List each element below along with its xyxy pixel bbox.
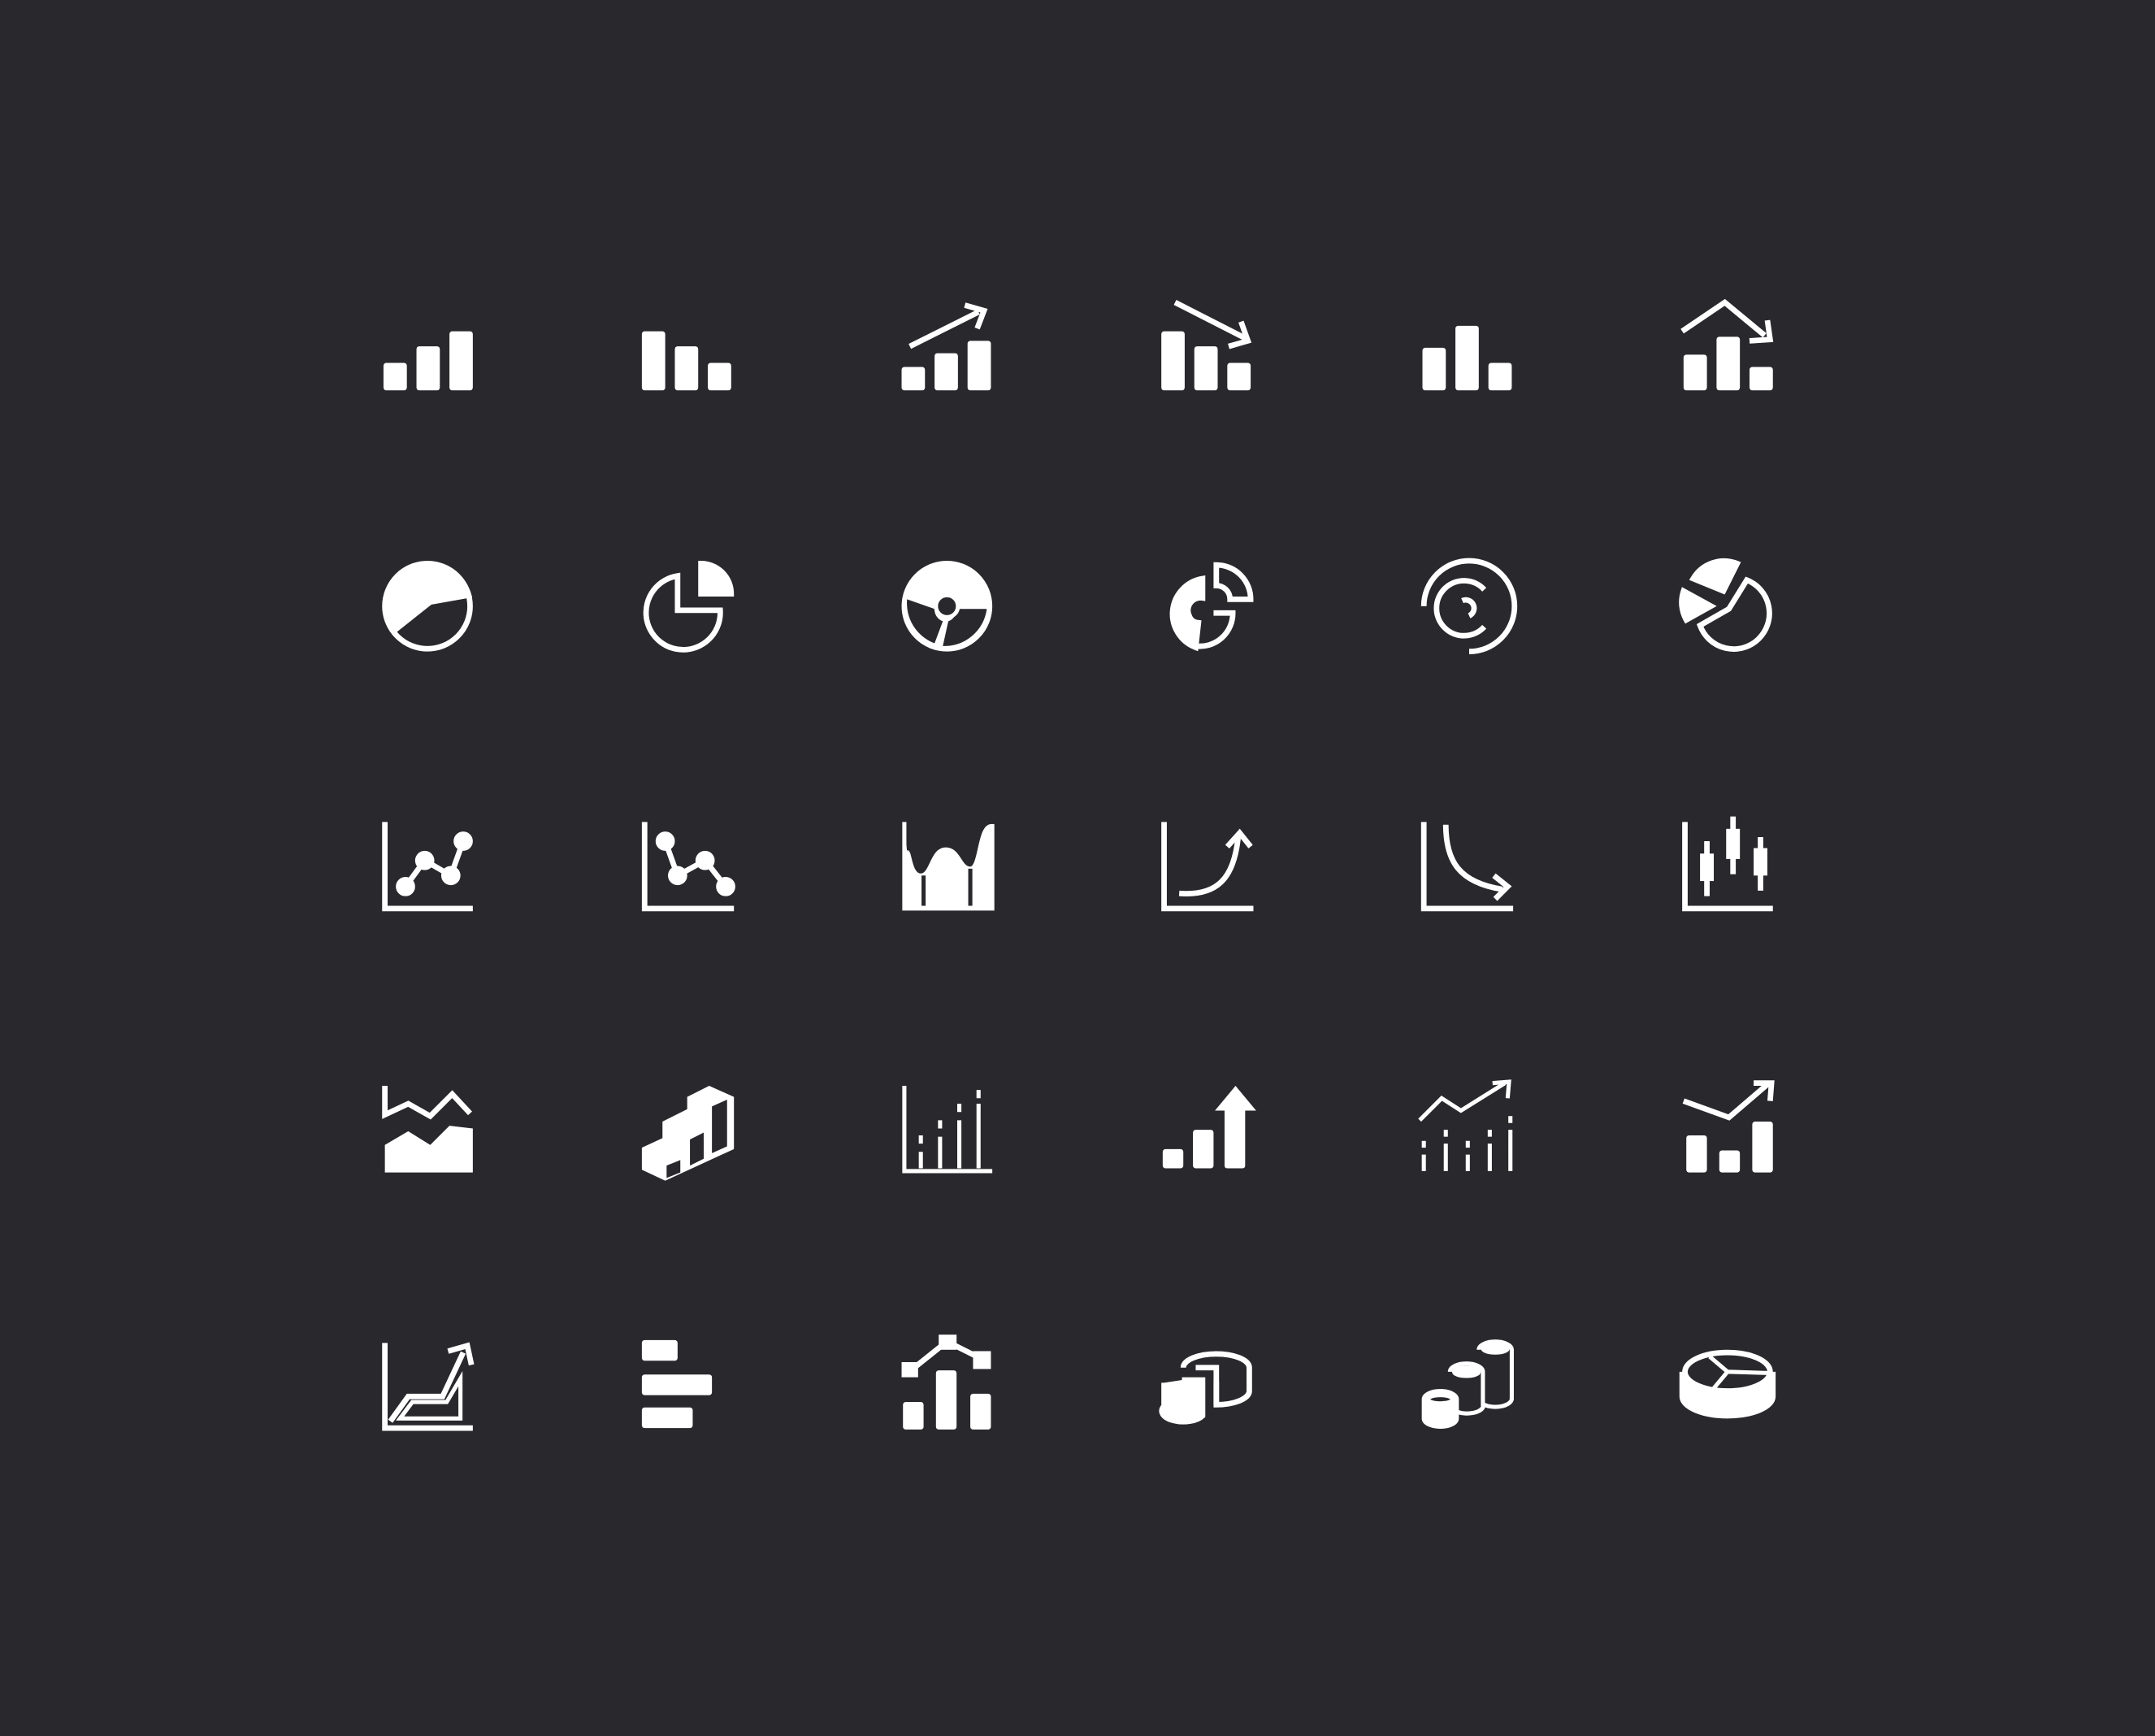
icon: curve up chart (1164, 822, 1253, 909)
icon: pie filled (385, 563, 470, 649)
icon: spiral rings (1424, 561, 1515, 652)
icon: 3D pie disk (1682, 1352, 1773, 1416)
icon: bars with down arrow (1161, 302, 1251, 390)
icon: dashed bars with trend (1420, 1082, 1511, 1171)
icon: pie split pieces (1682, 561, 1769, 649)
icon: descending bars (642, 332, 731, 390)
icon: horizontal bars (642, 1340, 712, 1428)
icon: bars with up arrow (902, 305, 991, 390)
icon: 3D coin stacks (1424, 1342, 1511, 1426)
icon: donut exploded (1173, 565, 1251, 648)
icon: line chart with points (385, 822, 473, 909)
icon: bars with check-like arrow (1684, 1083, 1773, 1173)
icon: 3D pie pieces (1162, 1354, 1249, 1421)
icon: curve down chart (1424, 822, 1513, 909)
icon: 3D isometric bars (642, 1086, 734, 1181)
icon: descending line chart (644, 822, 734, 909)
icon: pie outline exploded (646, 563, 731, 649)
icon: ascending bars (384, 332, 473, 390)
icon: area wave chart (904, 822, 992, 909)
icon: candlestick chart (1685, 817, 1773, 909)
icon: area/line chart (385, 1086, 473, 1173)
icon: bars with peak line (1682, 302, 1773, 390)
icon: dashed bar chart (904, 1086, 992, 1171)
icon: bars with line overlay (902, 1335, 991, 1430)
icon: bars with up arrow big (1163, 1086, 1256, 1169)
icon: middle-high bars (1422, 326, 1511, 390)
icon: donut (904, 563, 990, 649)
icon: growth area chart (385, 1343, 473, 1428)
